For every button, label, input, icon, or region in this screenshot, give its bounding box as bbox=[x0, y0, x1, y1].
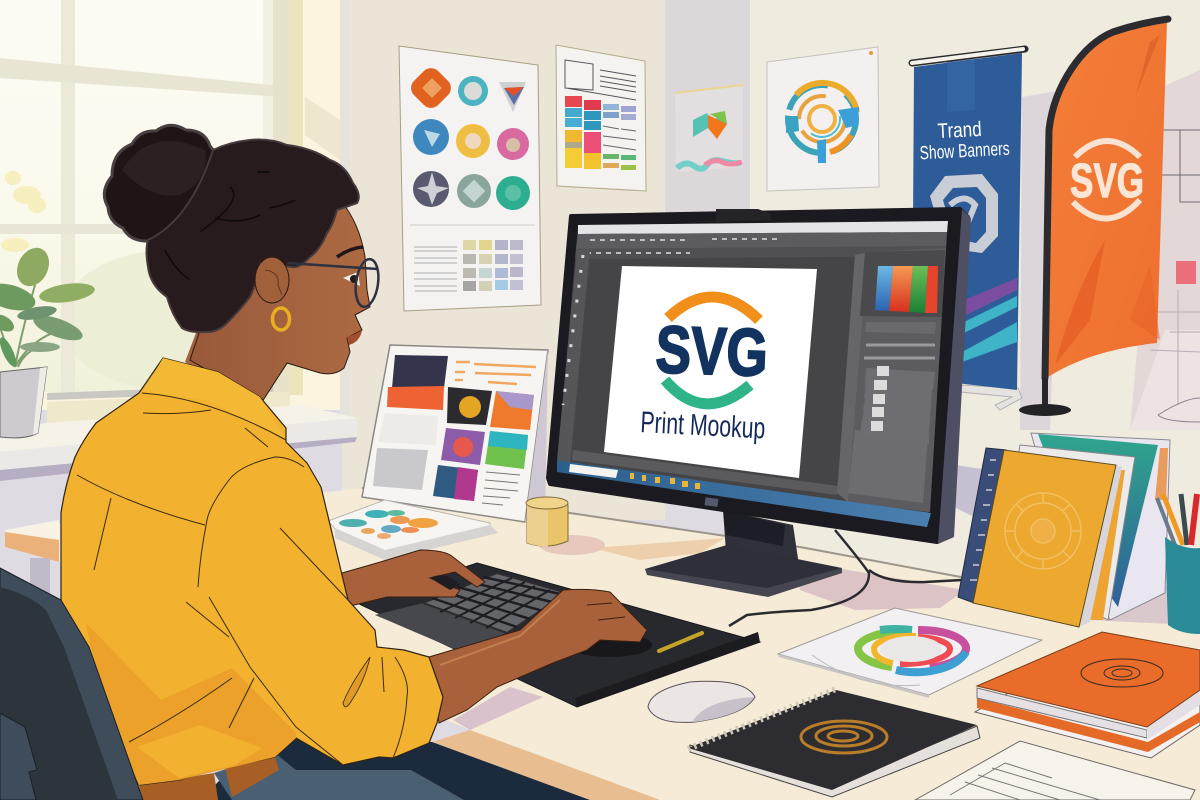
plant stems bbox=[0, 285, 60, 367]
window bbox=[0, 0, 350, 423]
SVG logo bbox=[655, 297, 769, 404]
poster divider and swatches bbox=[410, 224, 535, 226]
cup bbox=[1165, 537, 1200, 634]
hair bun highlight bbox=[122, 141, 206, 196]
roll-up banner: Trade Show Banners bbox=[912, 49, 1025, 410]
hand shadow bbox=[430, 575, 460, 590]
canvas gutter bbox=[572, 450, 838, 495]
belt bbox=[139, 773, 218, 800]
shirt shadow bbox=[86, 623, 296, 785]
office chair bbox=[0, 568, 143, 800]
colour blocks bbox=[565, 96, 636, 170]
under-desk wall strip bbox=[950, 465, 990, 520]
flag body bbox=[1048, 22, 1167, 377]
desk front edge bbox=[432, 730, 660, 800]
orange inner bbox=[1090, 470, 1125, 620]
roll-up banner: Trade Show Banners: Show Banners bbox=[919, 139, 1010, 164]
eye bbox=[343, 272, 360, 286]
banner stripes bbox=[964, 278, 1017, 316]
trousers bbox=[200, 733, 590, 800]
pen cup bbox=[1157, 494, 1200, 634]
bottom paper bbox=[915, 741, 1195, 800]
teal book bbox=[1038, 434, 1158, 607]
black drawing tablet and keyboard bbox=[357, 563, 760, 707]
yellow mug bbox=[526, 497, 568, 547]
earring bbox=[272, 308, 290, 330]
black spiral notebook bbox=[688, 689, 980, 797]
mouse bbox=[648, 681, 755, 722]
lips bbox=[347, 330, 362, 345]
monitor badge bbox=[705, 497, 718, 507]
pens bbox=[1157, 498, 1175, 545]
left hand bbox=[335, 550, 485, 606]
shirt body bbox=[61, 358, 443, 785]
potted plant bbox=[0, 243, 96, 438]
layer rows bbox=[860, 322, 936, 444]
paper with donut chart bbox=[778, 608, 1042, 698]
app toolbar bbox=[576, 232, 947, 249]
emblem bbox=[1005, 493, 1081, 569]
head bbox=[190, 202, 370, 402]
arm highlight bbox=[440, 600, 560, 665]
flag base bbox=[1019, 404, 1071, 416]
back white book bbox=[1031, 433, 1170, 620]
shirt lighter patch bbox=[137, 725, 262, 778]
flag creases bbox=[1136, 35, 1160, 95]
chair frame bbox=[0, 568, 143, 800]
orange notebook stack bbox=[975, 632, 1200, 758]
monitor screen bbox=[557, 221, 948, 527]
webcam bbox=[716, 209, 771, 222]
glasses bbox=[287, 258, 381, 308]
desk shadows bbox=[539, 535, 605, 555]
book stack upright bbox=[958, 433, 1170, 627]
neck bbox=[185, 300, 290, 402]
app title bar bbox=[578, 221, 948, 234]
canvas bbox=[604, 266, 817, 478]
tool icons bbox=[586, 239, 780, 253]
poster: layout sheet bbox=[556, 45, 646, 191]
poster: concentric logo print bbox=[767, 47, 879, 191]
banner octagon emblem bbox=[930, 174, 998, 253]
sleeve fold bbox=[343, 657, 370, 707]
taskbar bbox=[557, 460, 931, 527]
chair back bbox=[0, 587, 118, 800]
banner base bbox=[960, 385, 1022, 410]
left tool strip bbox=[557, 250, 590, 466]
spine bbox=[958, 448, 1006, 603]
SVG logo: SVG bbox=[655, 312, 769, 391]
leaves bbox=[0, 243, 96, 369]
feather flag bbox=[1019, 19, 1168, 416]
monitor cables bbox=[729, 530, 962, 626]
donut chart bbox=[858, 629, 966, 672]
gold emblem bbox=[801, 721, 887, 753]
desk leg bbox=[30, 558, 50, 603]
window sill bbox=[0, 405, 357, 481]
desk bbox=[5, 488, 1200, 800]
shirt collar shade bbox=[142, 358, 286, 440]
right panel bbox=[837, 252, 868, 502]
ear bbox=[255, 257, 289, 303]
icon grid bbox=[407, 64, 530, 210]
engraved mark bbox=[1081, 659, 1163, 687]
colour preview bbox=[875, 266, 938, 313]
print mockup caption: Print Mookup bbox=[640, 406, 766, 446]
hair bun bbox=[104, 125, 217, 241]
monitor bezel bbox=[548, 209, 968, 542]
banner body bbox=[912, 53, 1022, 390]
right forearm and hand bbox=[429, 589, 647, 723]
pages edge bbox=[1079, 465, 1122, 627]
flag pole bbox=[1045, 19, 1168, 378]
shadow under palm bbox=[568, 633, 652, 657]
stylus bbox=[659, 633, 702, 651]
white cover bbox=[1000, 445, 1135, 620]
papers with blobs on desk bbox=[328, 500, 498, 560]
tablet stand print bbox=[362, 345, 548, 522]
banner rod bbox=[912, 49, 1025, 63]
wall sketch grid behind flag bbox=[1150, 130, 1200, 422]
monitor bbox=[548, 209, 971, 597]
monitor stand neck bbox=[723, 510, 800, 572]
spiral binding bbox=[688, 689, 836, 749]
keyboard keys bbox=[423, 573, 567, 633]
flag logo: SVG bbox=[1070, 155, 1144, 208]
poster: icon sheet bbox=[399, 46, 541, 311]
person bbox=[61, 125, 647, 800]
keyboard trackpad bbox=[375, 603, 507, 650]
monitor stand base bbox=[645, 545, 842, 593]
hair main bbox=[146, 140, 359, 332]
chair armrest bbox=[0, 713, 37, 800]
banner text: Trand bbox=[937, 118, 982, 143]
flag logo bbox=[1070, 141, 1144, 219]
eyebrow bbox=[337, 247, 363, 257]
pot bbox=[0, 367, 47, 438]
poster: hanging print bbox=[675, 85, 743, 172]
shirt seams bbox=[77, 393, 408, 765]
yellow book bbox=[973, 450, 1116, 627]
